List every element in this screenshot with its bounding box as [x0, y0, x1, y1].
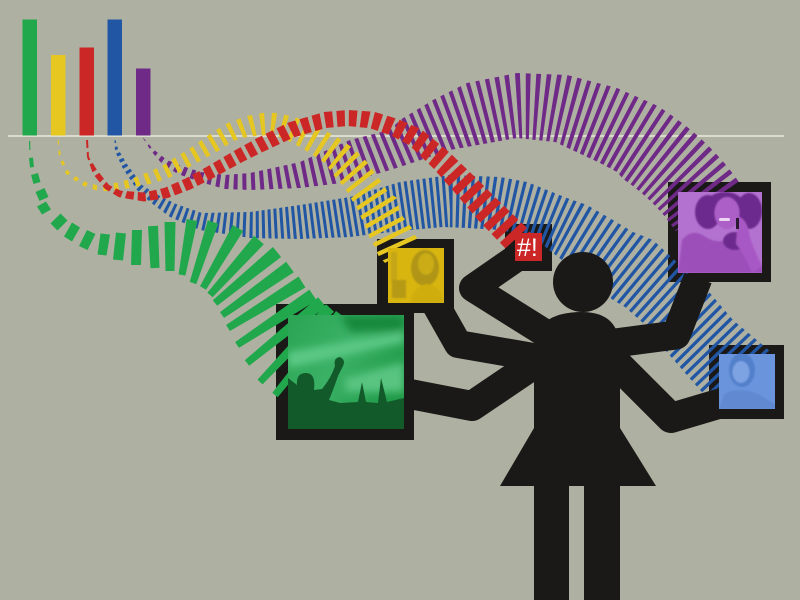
stick figure: [410, 252, 725, 600]
badge square: [515, 233, 542, 261]
ribbon: red: [87, 118, 525, 248]
frame: blue photo: [709, 345, 784, 419]
figure: arm to green photo: [410, 360, 540, 406]
crowd silhouette: [288, 357, 404, 429]
bar chart: [22, 20, 150, 136]
frame: purple photo: [668, 182, 771, 282]
frame: green photo: [276, 304, 414, 440]
ribbon: blue: [115, 140, 746, 382]
photo: green crowd: [288, 315, 404, 429]
frames behind ribbons: [276, 182, 784, 440]
ribbon: green: [29, 141, 344, 397]
figure: arm to purple photo: [600, 278, 698, 345]
photo: blue woman: [719, 353, 775, 409]
photo: purple woman on phone: [678, 192, 762, 273]
figure: arm to hashtag: [473, 254, 548, 335]
frame: red hashtag: [505, 224, 552, 271]
figure: torso and skirt: [500, 312, 656, 600]
badge text: #!: [517, 234, 538, 262]
figure: arm to blue photo: [605, 352, 725, 418]
hashtag badge: [515, 233, 542, 262]
bar: green: [22, 20, 37, 136]
axis line: [8, 135, 784, 137]
photo: yellow woman: [388, 248, 444, 303]
ribbon: yellow: [58, 123, 406, 258]
bar: blue: [108, 20, 122, 136]
figure: arm to yellow photo: [432, 298, 545, 359]
bar: purple: [136, 68, 150, 136]
figure: head: [553, 252, 613, 312]
ribbon: purple: [143, 105, 712, 214]
bar: yellow: [51, 55, 66, 136]
bar: red: [80, 48, 94, 136]
frame: yellow photo: [377, 239, 454, 313]
